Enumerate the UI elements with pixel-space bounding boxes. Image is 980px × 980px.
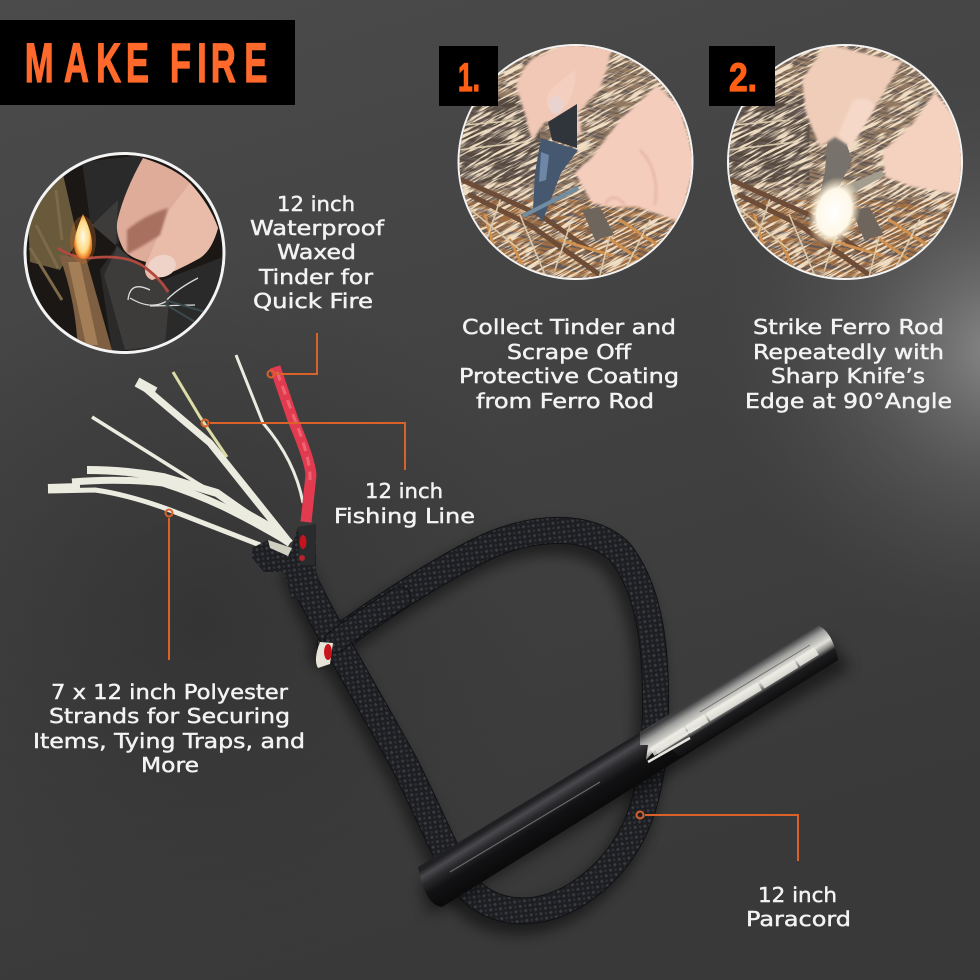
title banner (0, 20, 295, 105)
striking hand (802, 44, 902, 147)
paracord label: 12 inch (758, 883, 837, 907)
fray strands and tinder (48, 355, 311, 545)
holding hand (882, 92, 965, 195)
cut rope tip (316, 642, 333, 668)
photo: step 1 scraping the ferro rod (458, 44, 694, 280)
tinder label: 12 inch (277, 192, 355, 216)
step 1 instruction (459, 315, 679, 413)
fishing line label: Fishing Line (334, 504, 475, 528)
step 1 badge (439, 46, 498, 106)
photo: step 2 striking sparks (727, 44, 963, 280)
step 2 badge (709, 46, 775, 106)
holding hand (575, 85, 695, 222)
knife and rod (818, 136, 852, 202)
red tinder (275, 367, 311, 522)
paracord label: Paracord (746, 907, 851, 931)
polyester strands label: 7 x 12 inch Polyester (51, 680, 289, 704)
paracord label (746, 883, 851, 931)
blade hand (516, 44, 612, 140)
tinder label (250, 192, 385, 313)
step 1 instruction: Protective Coating (459, 364, 679, 388)
polyester strands label: Items, Tying Traps, and (33, 729, 305, 753)
tinder label: Waterproof (250, 216, 385, 240)
tinder label: Quick Fire (253, 289, 373, 313)
leader: fishing line (202, 420, 405, 470)
leader: paracord (636, 812, 798, 861)
leader: tinder (268, 333, 317, 378)
branch (59, 255, 112, 352)
step 2 instruction: Sharp Knife’s (771, 364, 925, 388)
flame (70, 216, 96, 264)
fishing line strand (173, 372, 227, 457)
ferro rod (418, 625, 850, 915)
knife (533, 138, 578, 220)
twine (58, 248, 168, 292)
step 2 instruction (745, 315, 952, 413)
title text: MAKE FIRE (25, 32, 267, 94)
step 2 badge: 2. (729, 56, 757, 100)
fishing line label: 12 inch (365, 479, 443, 503)
hand (117, 158, 218, 280)
photo: burning tinder (20, 150, 230, 360)
leader: polyester strands (166, 510, 172, 660)
rope frayed end (252, 524, 333, 668)
tinder label: Tinder for (258, 265, 374, 289)
tinder label: Waxed (277, 240, 356, 264)
step 1 instruction: Scrape Off (507, 340, 632, 364)
step 1 instruction: Collect Tinder and (462, 315, 676, 339)
polyester strands label: More (141, 753, 199, 777)
step 1 instruction: from Ferro Rod (476, 389, 654, 413)
step 2 instruction: Repeatedly with (753, 340, 944, 364)
step 2 instruction: Strike Ferro Rod (753, 315, 944, 339)
step 1 badge: 1. (458, 56, 480, 100)
spark flash (808, 178, 860, 246)
polyester strands label: Strands for Securing (49, 704, 290, 728)
fishing line label (334, 479, 475, 528)
polyester strands (48, 355, 303, 545)
step 2 instruction: Edge at 90°Angle (745, 389, 952, 413)
polyester strands label (33, 680, 305, 777)
paracord rope (297, 530, 656, 920)
